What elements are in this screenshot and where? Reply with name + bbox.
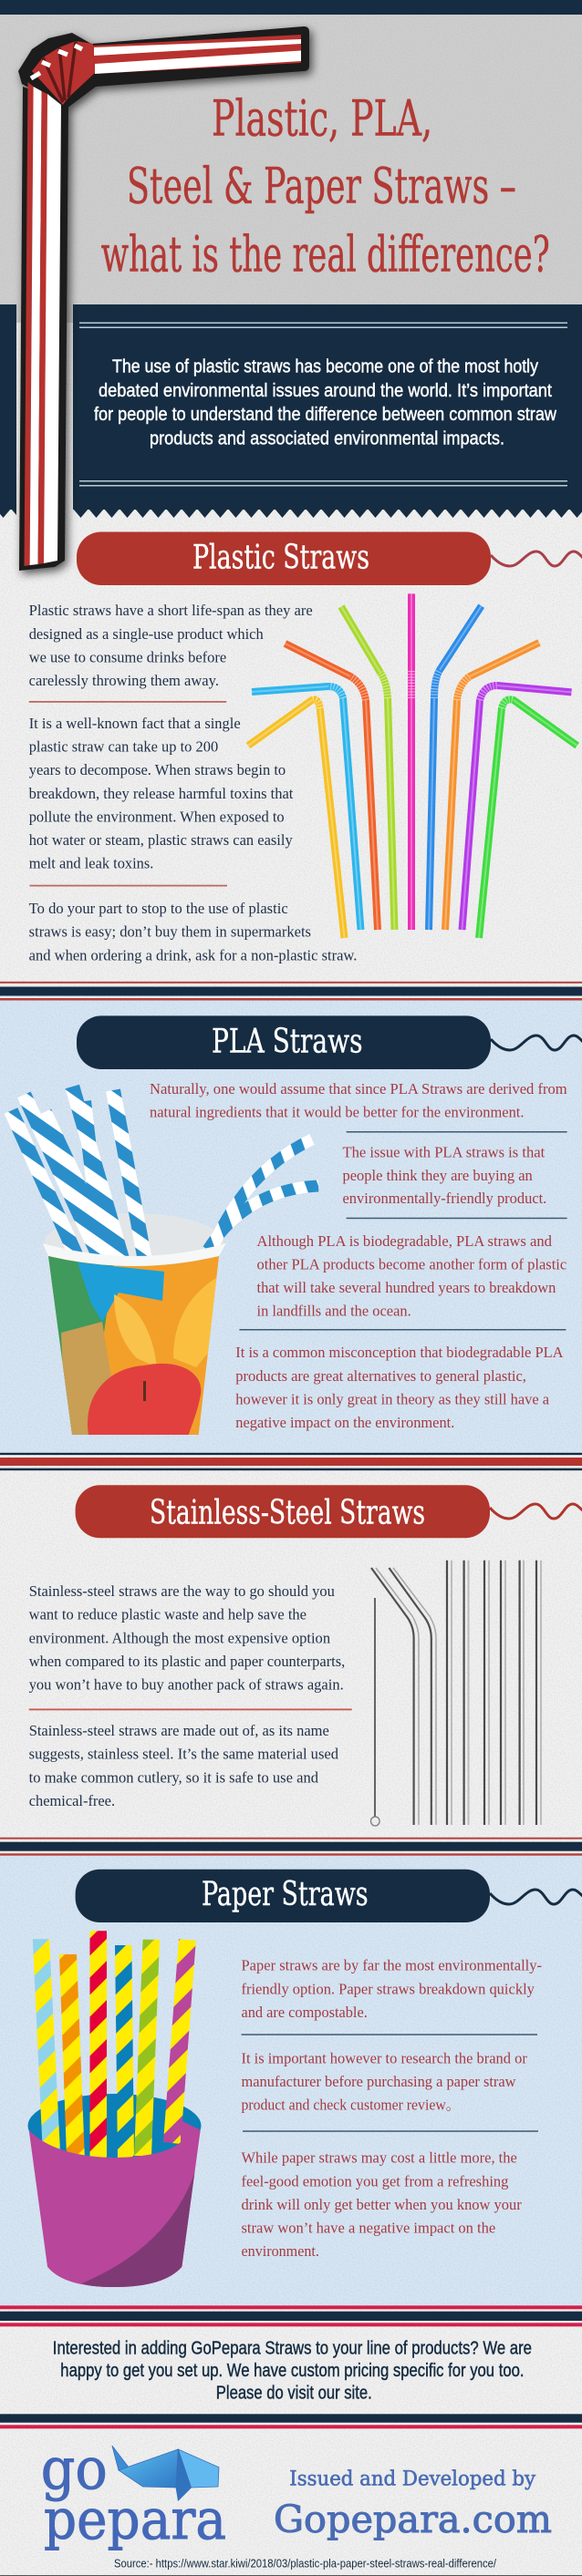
icon: origami whale (112, 2446, 219, 2500)
paper straws text: Paper straws are by far the most environmentally- (241, 1957, 542, 1974)
PLA straws text: natural ingredients that it would be better for the environment. (150, 1104, 524, 1121)
paper straws text: product and check customer review。 (241, 2096, 460, 2113)
paper straws text: straw won’t have a negative impact on the (241, 2220, 495, 2237)
plastic straws text (29, 602, 357, 963)
logo: gopepara: go (41, 2436, 108, 2502)
PLA straws text: that will take several hundred years to breakdown (257, 1279, 556, 1296)
plastic straws text: pollute the environment. When exposed to (29, 808, 285, 826)
plastic straws text: It is a well-known fact that a single (29, 715, 241, 732)
credit: issued and developed by: Issued and Developed by (289, 2468, 536, 2491)
icon: steel straws and brush (370, 1561, 541, 1826)
paper straws text: It is important however to research the brand or (241, 2049, 527, 2066)
paper straws text: environment. (241, 2242, 319, 2260)
credit: issued and developed by: Gopepara.com (274, 2498, 552, 2541)
heading: stainless-steel straws: Stainless-Steel Straws (150, 1495, 425, 1532)
stainless-steel straws text: environment. Although the most expensive option (29, 1629, 330, 1646)
panel: plastic straws (29, 532, 582, 963)
divider band 3 (0, 1838, 582, 1856)
icon: purple cup with paper straws (27, 1931, 201, 2293)
stainless-steel straws text: Stainless-steel straws are the way to go should you (29, 1582, 335, 1600)
PLA straws text: other PLA products become another form of plastic (257, 1256, 566, 1273)
heading: PLA straws (77, 1015, 491, 1069)
PLA straws text: Naturally, one would assume that since PLA Straws are derived from (150, 1080, 567, 1097)
source line: Source:- https://www.star.kiwi/2018/03/plastic-pla-paper-steel-straws-real-difference/ (114, 2557, 496, 2571)
PLA straws text: It is a common misconception that biodegradable PLA (235, 1344, 564, 1361)
heading: plastic straws: Plastic Straws (192, 540, 369, 577)
intro text: debated environmental issues around the world. It’s important (99, 381, 552, 401)
logo: gopepara: pepara (44, 2488, 226, 2552)
PLA straws text: in landfills and the ocean. (257, 1303, 411, 1320)
panel: stainless-steel straws (29, 1485, 582, 1826)
stainless-steel straws text: suggests, stainless steel. It’s the same material used (29, 1746, 339, 1763)
PLA straws text: products are great alternatives to general plastic, (235, 1367, 526, 1385)
plastic straws text: straws is easy; don’t buy them in supermarkets (29, 923, 311, 941)
PLA straws text (150, 1080, 567, 1431)
plastic straws text: carelessly throwing them away. (29, 672, 219, 689)
intro text: The use of plastic straws has become one of the most hotly (112, 357, 538, 377)
stainless-steel straws text: to make common cutlery, so it is safe to use and (29, 1768, 319, 1786)
heading: stainless-steel straws (76, 1485, 490, 1538)
paper straws text: drink will only get better when you know your (241, 2196, 522, 2213)
plastic straws text: we use to consume drinks before (29, 648, 226, 665)
top navy bar (0, 0, 582, 15)
plastic straws text: breakdown, they release harmful toxins that (29, 785, 294, 802)
paper straws text: While paper straws may cost a little more, the (241, 2149, 517, 2167)
panel: introduction (0, 304, 582, 518)
icon: fruit cup with striped straws (11, 1087, 318, 1440)
title (101, 89, 550, 283)
PLA straws text: negative impact on the environment. (235, 1414, 454, 1431)
paper straws text: and are compostable. (241, 2004, 368, 2021)
PLA straws text: Although PLA is biodegradable, PLA straws and (257, 1232, 553, 1250)
plastic straws text: designed as a single-use product which (29, 625, 264, 643)
stainless-steel straws text: chemical-free. (29, 1792, 115, 1809)
call to action text (53, 2337, 532, 2404)
plastic straws text: Plastic straws have a short life-span as they are (29, 602, 313, 619)
plastic straws text: To do your part to stop to the use of plastic (29, 900, 288, 917)
stainless-steel straws text: when compared to its plastic and paper counterparts, (29, 1653, 345, 1670)
icon: colourful bendy straws (248, 593, 577, 938)
PLA straws text: however it is only great in theory as they still have a (235, 1391, 550, 1407)
divider band 5 (0, 2414, 582, 2428)
divider band 4 (0, 2305, 582, 2326)
paper straws text: manufacturer before purchasing a paper straw (241, 2073, 516, 2090)
title: Plastic, PLA, (212, 89, 432, 148)
stainless-steel straws text: you won’t have to buy another pack of straws again. (29, 1676, 344, 1694)
divider band 2 (0, 1453, 582, 1470)
paper straws text: friendly option. Paper straws breakdown quickly (241, 1980, 535, 1997)
plastic straws text: hot water or steam, plastic straws can easily (29, 831, 293, 849)
heading: plastic straws (77, 532, 491, 585)
plastic straws text: melt and leak toxins. (29, 855, 153, 872)
stainless-steel straws text (29, 1582, 352, 1809)
call to action text: Please do visit our site. (216, 2383, 372, 2404)
intro text: products and associated environmental impacts. (150, 428, 504, 448)
intro text (94, 357, 556, 448)
paper straws text (241, 1957, 542, 2260)
panel: PLA straws (11, 1015, 582, 1440)
PLA straws text: The issue with PLA straws is that (343, 1143, 546, 1160)
paper straws text: feel-good emotion you get from a refreshing (241, 2172, 508, 2190)
logo: gopepara (41, 2436, 226, 2552)
heading: paper straws (76, 1870, 490, 1922)
heading: PLA straws: PLA Straws (212, 1024, 363, 1061)
divider band 1 (0, 982, 582, 1001)
plastic straws text: plastic straw can take up to 200 (29, 738, 218, 756)
PLA straws text: environmentally-friendly product. (343, 1190, 546, 1207)
icon: striped bendy straw (18, 26, 309, 571)
stainless-steel straws text: want to reduce plastic waste and help save the (29, 1606, 307, 1623)
credit: issued and developed by (274, 2468, 552, 2541)
PLA straws text: people think they are buying an (343, 1167, 533, 1184)
plastic straws text: years to decompose. When straws begin to (29, 761, 286, 778)
plastic straws text: and when ordering a drink, ask for a non-plastic straw. (29, 946, 357, 963)
heading: paper straws: Paper Straws (202, 1876, 369, 1913)
stainless-steel straws text: Stainless-steel straws are made out of, as its name (29, 1722, 329, 1739)
panel: paper straws (27, 1870, 582, 2293)
